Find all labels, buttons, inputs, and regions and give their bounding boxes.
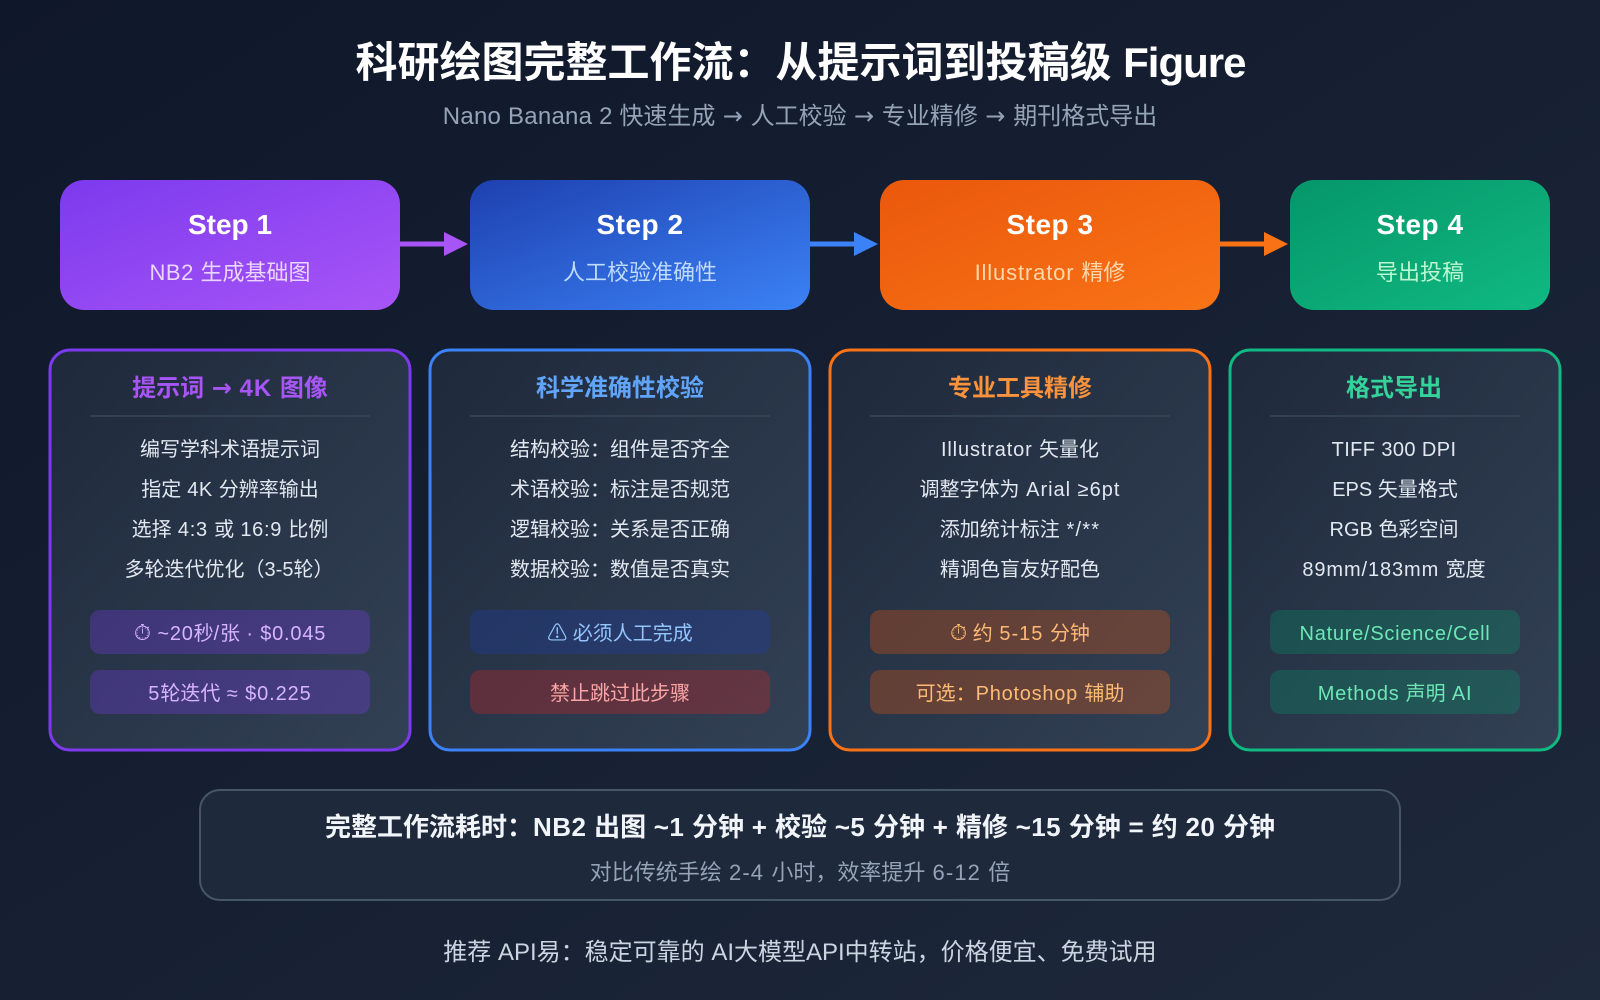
time tag (870, 610, 1170, 654)
journals tag (1270, 610, 1520, 654)
panel: prompt to 4K image (50, 350, 410, 750)
panel body text (510, 438, 730, 581)
panel body text: 术语校验：标注是否规范 (510, 478, 730, 501)
panel body text: 精调色盲友好配色 (940, 558, 1100, 581)
manual required tag: ⚠ 必须人工完成 (547, 622, 693, 645)
methods tag: Methods 声明 AI (1318, 682, 1472, 705)
do not skip tag (470, 670, 770, 714)
methods tag (1270, 670, 1520, 714)
iteration cost tag (90, 670, 370, 714)
panel heading: 专业工具精修 (948, 375, 1092, 402)
time and cost tag: ⏱ ~20秒/张 · $0.045 (134, 620, 326, 645)
manual required tag (470, 610, 770, 654)
panel body text: EPS 矢量格式 (1332, 478, 1458, 501)
step 4 box (1290, 180, 1550, 310)
panel heading: 科学准确性校验 (536, 374, 704, 402)
time tag: ⏱ 约 5-15 分钟 (950, 620, 1090, 645)
panel body text: 结构校验：组件是否齐全 (510, 438, 730, 461)
step 1 box: Step 1 (188, 209, 272, 240)
step 3 box: Illustrator 精修 (975, 260, 1125, 285)
arrow: step 2 to step 3 (810, 232, 878, 256)
panel body text: TIFF 300 DPI (1332, 439, 1456, 461)
optional tool tag: 可选：Photoshop 辅助 (916, 682, 1124, 705)
step 2 box: 人工校验准确性 (563, 260, 717, 285)
panel body text: Illustrator 矢量化 (941, 438, 1099, 461)
step 4 box: 导出投稿 (1376, 260, 1464, 285)
step 1 box: NB2 生成基础图 (150, 260, 310, 285)
panel body text: 指定 4K 分辨率输出 (141, 478, 319, 501)
step 2 box: Step 2 (596, 209, 684, 240)
arrow: step 1 to step 2 (400, 232, 468, 256)
summary box: 完整工作流耗时：NB2 出图 ~1 分钟 + 校验 ~5 分钟 + 精修 ~15 分钟 = 约 20 分钟 (325, 812, 1275, 842)
subtitle: Nano Banana 2 快速生成 → 人工校验 → 专业精修 → 期刊格式导出 (443, 102, 1157, 130)
footer recommendation: 推荐 API易：稳定可靠的 AI大模型API中转站，价格便宜、免费试用 (443, 939, 1157, 966)
do not skip tag: 禁止跳过此步骤 (550, 682, 690, 705)
step 1 box (60, 180, 400, 310)
panel body text (1302, 439, 1486, 581)
panel: format export (1230, 350, 1560, 750)
panel body text: 逻辑校验：关系是否正确 (510, 518, 730, 541)
summary box: 对比传统手绘 2-4 小时，效率提升 6-12 倍 (590, 860, 1010, 885)
optional tool tag (870, 670, 1170, 714)
panel body text: 添加统计标注 */** (940, 518, 1100, 541)
step 3 box (880, 180, 1220, 310)
panel: scientific accuracy check (430, 350, 810, 750)
panel body text: 调整字体为 Arial ≥6pt (920, 478, 1120, 501)
step 4 box: Step 4 (1376, 209, 1464, 240)
summary box (200, 790, 1400, 900)
iteration cost tag: 5轮迭代 ≈ $0.225 (148, 682, 312, 705)
title: 科研绘图完整工作流：从提示词到投稿级 Figure (355, 39, 1246, 86)
panel heading: 提示词 → 4K 图像 (132, 374, 328, 402)
panel heading: 格式导出 (1346, 375, 1442, 402)
panel body text: 89mm/183mm 宽度 (1302, 558, 1486, 581)
arrow: step 3 to step 4 (1220, 232, 1288, 256)
panel body text: 数据校验：数值是否真实 (510, 558, 730, 581)
step 2 box (470, 180, 810, 310)
step 3 box: Step 3 (1006, 209, 1094, 240)
panel body text: 多轮迭代优化（3-5轮） (125, 558, 333, 581)
journals tag: Nature/Science/Cell (1300, 623, 1490, 645)
panel body text: 编写学科术语提示词 (140, 438, 320, 461)
panel body text: RGB 色彩空间 (1330, 518, 1458, 541)
panel body text (920, 438, 1120, 581)
panel body text: 选择 4:3 或 16:9 比例 (132, 518, 328, 541)
panel body text (125, 438, 333, 581)
panel: professional tool refinement (830, 350, 1210, 750)
time and cost tag (90, 610, 370, 654)
